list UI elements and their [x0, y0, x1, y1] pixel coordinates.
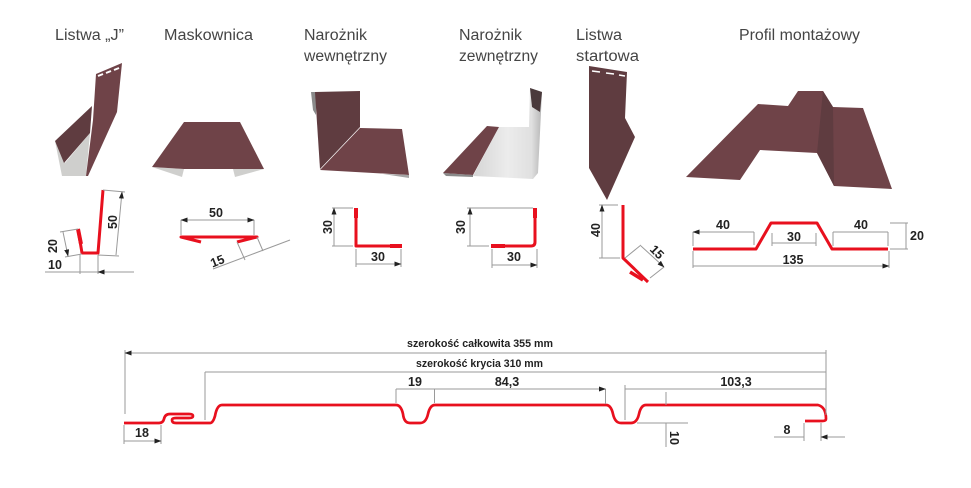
section drawing: Listwa J: 50: [106, 215, 120, 229]
3D render: Narożnik wewnętrzny: [311, 91, 409, 178]
heading: Listwa startowa: startowa: [576, 48, 639, 65]
dimension lines: [124, 350, 845, 447]
section drawing: Maskownica: 50: [209, 206, 223, 220]
dimension values: [135, 375, 791, 445]
3D render: Maskownica: [152, 122, 264, 177]
section drawing: Listwa J: [45, 190, 134, 274]
heading: Narożnik zewnętrzny: Narożnik: [459, 27, 522, 44]
section drawing: Profil montażowy: 20: [910, 229, 924, 243]
section drawing: Profil montażowy: [693, 218, 924, 268]
section drawing: Profil montażowy: 30: [787, 230, 801, 244]
section drawing: Narożnik zewnętrzny: [454, 208, 537, 268]
panel: Listwa J: [45, 27, 134, 274]
panel: Narożnik wewnętrzny: [303, 27, 409, 267]
section drawing: Listwa startowa: 15: [647, 242, 667, 262]
panel: Profil montażowy: [686, 27, 924, 268]
heading: Profil montażowy: Profil montażowy: [739, 27, 860, 44]
label: covering width: szerokość krycia 310 mm: [416, 358, 543, 370]
section drawing: Listwa J: 20: [46, 239, 60, 253]
3D render: Listwa J: [55, 63, 122, 176]
dimension values: 10: [667, 431, 681, 445]
dimension values: 19: [408, 375, 422, 389]
section drawing: Narożnik wewnętrzny: 30: [321, 220, 335, 234]
panel: siding panel cross-section: [124, 338, 845, 447]
dimension values: 8: [784, 423, 791, 437]
label: total width: szerokość całkowita 355 mm: [407, 338, 553, 350]
panel: Maskownica: [152, 27, 290, 270]
heading: Listwa J: Listwa „J”: [55, 27, 124, 44]
3D render: Listwa startowa: [589, 66, 635, 200]
section drawing: Profil montażowy: 135: [783, 253, 803, 267]
heading: Maskownica: Maskownica: [164, 27, 253, 44]
section drawing: Narożnik wewnętrzny: [321, 208, 402, 267]
section drawing: Listwa startowa: 40: [589, 223, 603, 237]
heading: Listwa startowa: Listwa: [576, 27, 622, 44]
heading: Narożnik wewnętrzny: Narożnik: [304, 27, 367, 44]
red profile line: [124, 405, 826, 423]
heading: Narożnik zewnętrzny: zewnętrzny: [459, 48, 538, 65]
dimension values: 18: [135, 426, 149, 440]
section drawing: Narożnik zewnętrzny: 30: [454, 220, 468, 234]
dimension values: 103,3: [720, 375, 752, 389]
section drawing: Narożnik wewnętrzny: 30: [371, 250, 385, 264]
section drawing: Narożnik zewnętrzny: 30: [507, 250, 521, 264]
section drawing: Maskownica: 15: [208, 252, 227, 270]
3D render: Profil montażowy: [686, 91, 892, 189]
panel: Narożnik zewnętrzny: [443, 27, 542, 268]
3D render: Narożnik zewnętrzny: [443, 88, 542, 179]
dimension values: 84,3: [495, 375, 519, 389]
section drawing: Listwa J: 10: [48, 258, 62, 272]
section drawing: Profil montażowy: 40: [854, 218, 868, 232]
section drawing: Listwa startowa: [589, 205, 667, 282]
heading: Narożnik wewnętrzny: wewnętrzny: [303, 48, 387, 65]
section drawing: Profil montażowy: 40: [716, 218, 730, 232]
panel: Listwa startowa: [576, 27, 667, 282]
section drawing: Maskownica: [181, 206, 290, 270]
